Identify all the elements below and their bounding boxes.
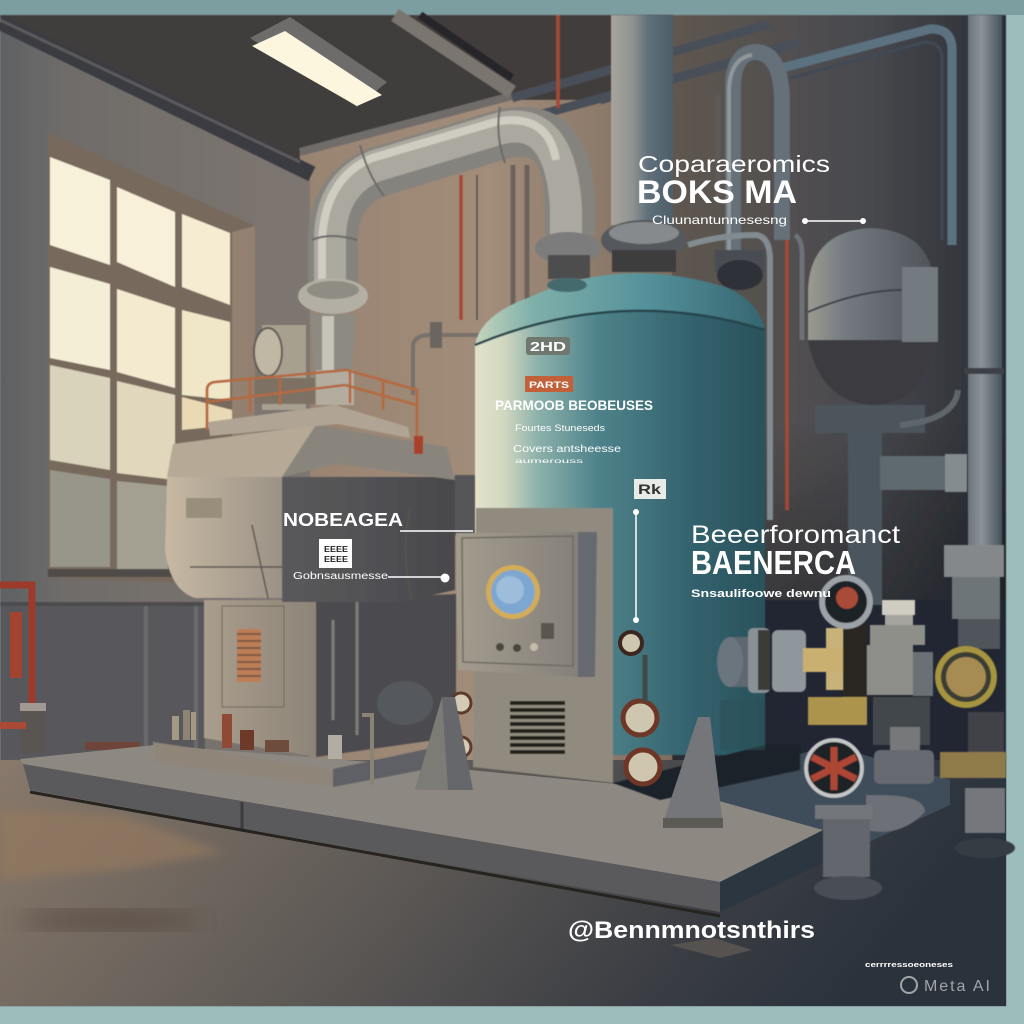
overhead ducts — [512, 24, 800, 120]
tank text lines: Covers antsheesse — [513, 444, 622, 455]
callout: furnace label: NOBEAGEA — [283, 510, 403, 530]
callout: top right heading — [637, 151, 866, 227]
small parts on base — [172, 710, 372, 785]
tank text lines: PARMOOB BEOBEUSES — [495, 397, 653, 413]
badge: 2HD — [530, 339, 566, 354]
callout: tank side tag — [633, 479, 666, 623]
callout: furnace label — [283, 510, 473, 582]
callout: performance heading — [691, 521, 900, 600]
right lower pipe — [940, 712, 1015, 858]
tank text lines: Fourtes Stuneseds — [515, 423, 606, 433]
valve assembly, right — [717, 578, 1015, 900]
callout: furnace label: Gobnsausmesse — [293, 571, 389, 582]
orange label: PARTS — [529, 380, 569, 390]
pedestal — [204, 594, 456, 757]
callout: top right heading: BOKS MA — [637, 174, 797, 210]
dials — [451, 632, 660, 784]
pressure vessel, right — [808, 228, 1004, 649]
callout: furnace label: EEEE — [324, 545, 349, 554]
panel knobs — [496, 623, 554, 652]
footer small print: cerrrressoeoneses — [865, 962, 953, 969]
gauge — [486, 565, 540, 619]
callout: furnace label: EEEE — [324, 555, 349, 564]
red wheel valve — [806, 740, 862, 796]
tank text lines: aumerouss — [515, 459, 583, 465]
brass fitting — [803, 622, 867, 725]
callout: top right heading: Cluunantunnesesng — [652, 213, 787, 227]
callout: performance heading: Beeerforomanct — [691, 521, 900, 549]
floor — [0, 760, 1006, 1006]
tank text lines — [495, 397, 653, 465]
lower pipe column — [814, 697, 934, 900]
hood body — [165, 477, 282, 598]
triangular supports — [415, 697, 723, 828]
orange label — [525, 376, 573, 392]
grey block — [867, 600, 933, 696]
callout: top right heading: Coparaeromics — [638, 151, 830, 177]
vent grille — [510, 703, 565, 752]
burner equipment — [262, 325, 306, 410]
badge — [526, 337, 570, 355]
base step — [153, 742, 333, 787]
control housing — [456, 508, 613, 783]
vertical pipes, top — [413, 15, 1004, 550]
furnace unit, left — [153, 325, 476, 787]
window — [48, 133, 255, 585]
watermark: Meta AI: Meta AI — [924, 978, 990, 995]
callout: performance heading: Snsaulifoowe dewnu — [691, 588, 831, 600]
horizontal pipe — [717, 628, 806, 693]
railing — [207, 370, 417, 440]
callout: performance heading: BAENERCA — [691, 544, 856, 581]
main tank — [475, 273, 800, 800]
exhaust flanges — [298, 232, 601, 400]
ceiling light — [250, 17, 387, 107]
callout: tank side tag: Rk — [638, 481, 661, 497]
wall pipes and red valves, left — [0, 585, 140, 760]
top plate — [208, 405, 410, 438]
curved exhaust pipe — [312, 107, 570, 292]
platform — [20, 745, 950, 958]
gold dial — [935, 646, 997, 708]
ring gauge — [822, 578, 870, 626]
tank labels — [495, 337, 653, 465]
footer handle: @Bennmnotsnthirs — [568, 917, 815, 944]
